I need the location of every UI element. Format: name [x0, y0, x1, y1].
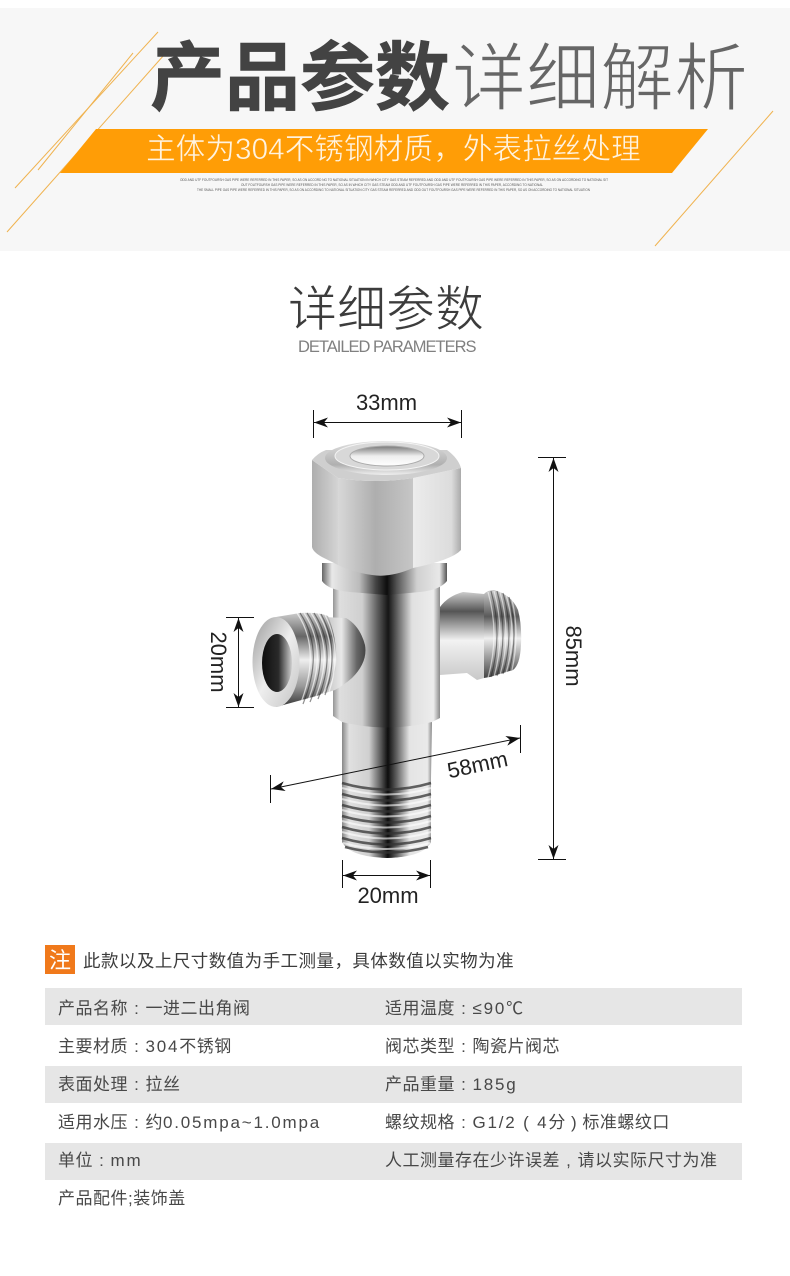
section heading: 详细参数 — [288, 270, 484, 341]
valve product image — [252, 441, 521, 858]
spec: surface finish: : — [134, 1075, 139, 1094]
hex nut — [312, 441, 461, 576]
tiny caption text — [180, 178, 609, 192]
spec: material: : — [134, 1037, 139, 1056]
spec: water pressure: : — [134, 1113, 139, 1132]
main title bold part: 产品参数 — [150, 17, 450, 126]
valve bottom thread — [342, 776, 431, 858]
spec: unit: : — [99, 1151, 104, 1170]
tiny caption text: ODD AND UTF FOUTFOURSH GAS PIPE WERE REFERRED IN THIS PAPER, SO AS ON ACCORD NG TO NATIONAL SITUATION IN WHICH CITY GAS STEAM REFERRED AND ODD AND UTF FOUTFOURSH GAS PIPE WERE REFERRED IN THIS PAPER, SO AS ON ACCORDING TO NATIONAL SIT — [180, 178, 609, 182]
note text: 此款以及上尺寸数值为手工测量，具体数值以实物为准 — [83, 951, 514, 971]
spec: thread: : — [461, 1113, 466, 1132]
spec row backgrounds — [45, 988, 742, 1180]
spec: material: 主要材质 304不锈钢 — [58, 1037, 232, 1056]
spec: measurement caveat: 人工测量存在少许误差 请以实际尺寸为准 — [385, 1151, 718, 1170]
spec: temperature: 适用温度 ≤90℃ — [385, 999, 524, 1018]
spec: unit: 单位 mm — [58, 1151, 142, 1170]
panel: header banner — [0, 8, 790, 251]
spec: product name: : — [134, 999, 139, 1018]
left outlet port — [252, 613, 365, 707]
dimension: top width 33mm — [314, 390, 462, 438]
valve body shaft — [333, 585, 440, 728]
spec: surface finish: 表面处理 拉丝 — [58, 1075, 180, 1094]
dimension: top width 33mm: 33mm — [356, 390, 417, 415]
spec: product name: 产品名称 一进二出角阀 — [58, 999, 250, 1018]
note icon: 注 — [49, 943, 71, 975]
dimension: port height 20mm — [206, 618, 254, 708]
orange title band — [60, 129, 708, 173]
spec: valve core: 阀芯类型 陶瓷片阀芯 — [385, 1037, 560, 1056]
spec: weight: : — [461, 1075, 466, 1094]
spec: valve core: : — [461, 1037, 466, 1056]
valve collar — [322, 563, 447, 595]
decorative orange diagonal lines — [6, 32, 774, 246]
band subtitle: 主体为304不锈钢材质，外表拉丝处理 — [146, 133, 641, 166]
valve lower stem — [342, 722, 432, 778]
right outlet port — [440, 590, 521, 680]
section subheading: DETAILED PARAMETERS — [298, 338, 476, 356]
spec: water pressure: 适用水压 约0.05mpa~1.0mpa — [58, 1113, 321, 1132]
spec: temperature: : — [461, 999, 466, 1018]
dimension: overall width 58mm: 58mm — [445, 746, 510, 783]
dimension: bottom width 20mm — [342, 860, 430, 908]
dimension: port height 20mm: 20mm — [206, 631, 231, 693]
spec: weight: 产品重量 185g — [385, 1075, 518, 1094]
main title light part: 详细解析 — [452, 19, 748, 126]
dimension: total height 85mm: 85mm — [561, 625, 586, 687]
spec: thread: 螺纹规格 G1/2 ( 4分 ) 标准螺纹口 — [385, 1113, 670, 1132]
dimension: total height 85mm — [538, 458, 586, 860]
spec table — [45, 988, 742, 1208]
dimension: bottom width 20mm: 20mm — [357, 883, 419, 908]
note icon — [45, 945, 75, 974]
spec: measurement caveat: , — [566, 1151, 571, 1170]
tiny caption text: OUT FOUTFOURSH GAS PIPE WERE REFERRED IN THIS PAPER, SO AS IN WHICH CITY GAS STEAM ODD AND UTF FOUTFOURSH GAS PIPE WERE REFERRED IN THIS PAPER, ACCORDING TO NATIONAL — [241, 183, 543, 187]
tiny caption text: THE SMALL PIPE GAS PIPE WERE REFERRED IN THIS PAPER, SO AS ON ACCORDING TO NATIONAL SITUATION CITY GAS STEAM REFERRED AND ODD OUT FOUTFOURSH GAS PIPE WERE REFERRED IN THIS PAPER, SO AS ON ACCORDING TO NATIONAL SITUATION — [197, 188, 590, 192]
spec: accessories: 产品配件;装饰盖 — [58, 1189, 186, 1208]
dimension: overall width 58mm — [270, 725, 520, 803]
